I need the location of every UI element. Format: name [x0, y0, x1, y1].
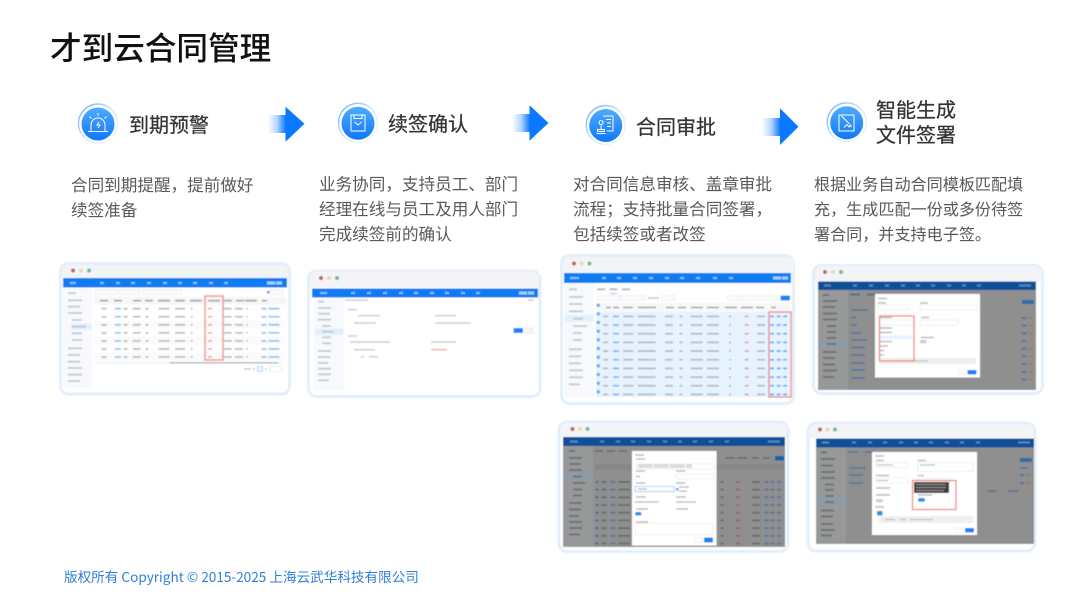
footer: copyright: 版权所有 Copyright © 2015-2025 上海云武华科技有限公司 [64, 566, 419, 586]
icon: alarm [78, 104, 118, 143]
step 1: heading 到期预警 [78, 104, 209, 143]
description 2: 经理在线与员工及用人部门 [319, 200, 518, 219]
step 4: heading 智能生成文件签署 [827, 99, 956, 147]
description 3: 流程；支持批量合同签署， [573, 200, 772, 219]
description 4: 署合同，并支持电子签。 [814, 226, 991, 244]
step 4: heading 智能生成文件签署: 文件签署 [876, 124, 956, 147]
description 2: 业务协同，支持员工、部门 [319, 175, 518, 194]
screenshot 5: batch signing dialog [559, 422, 788, 552]
description 3: 包括续签或者改签 [573, 225, 706, 244]
screenshot 4: template selection dialog [814, 266, 1042, 394]
screenshot 6: e-signature dialog [808, 423, 1035, 551]
description 2 [319, 175, 518, 244]
description 2: 完成续签前的确认 [319, 225, 452, 244]
arrow 2 [512, 105, 548, 141]
description 1: 续签准备 [71, 201, 138, 220]
screenshot 1: expiry warning list [60, 264, 290, 394]
step 4: heading 智能生成文件签署: 智能生成 [876, 99, 956, 122]
description 3 [573, 175, 772, 244]
arrow 3 [762, 108, 798, 145]
title: 才到云合同管理 [50, 30, 271, 66]
description 4: 充，生成匹配一份或多份待签 [814, 201, 1023, 219]
step 3: heading 合同审批: 合同审批 [636, 116, 716, 139]
step 1: heading 到期预警: 到期预警 [129, 114, 209, 137]
step 2: heading 续签确认: 续签确认 [388, 113, 468, 136]
description 3: 对合同信息审核、盖章审批 [573, 175, 772, 194]
screenshot 2: renewal confirmation detail [308, 271, 540, 396]
description 1 [71, 176, 254, 220]
step 3: heading 合同审批 [586, 106, 716, 144]
description 4: 根据业务自动合同模板匹配填 [814, 176, 1023, 194]
icon: signature document [827, 103, 866, 142]
arrow 1 [268, 107, 304, 142]
icon: stamp document [586, 106, 625, 144]
description 1: 合同到期提醒，提前做好 [71, 176, 254, 195]
icon: clipboard [338, 103, 378, 142]
description 4 [814, 176, 1023, 244]
screenshot 3: contract list with batch actions [562, 256, 794, 404]
step 2: heading 续签确认 [338, 103, 468, 142]
